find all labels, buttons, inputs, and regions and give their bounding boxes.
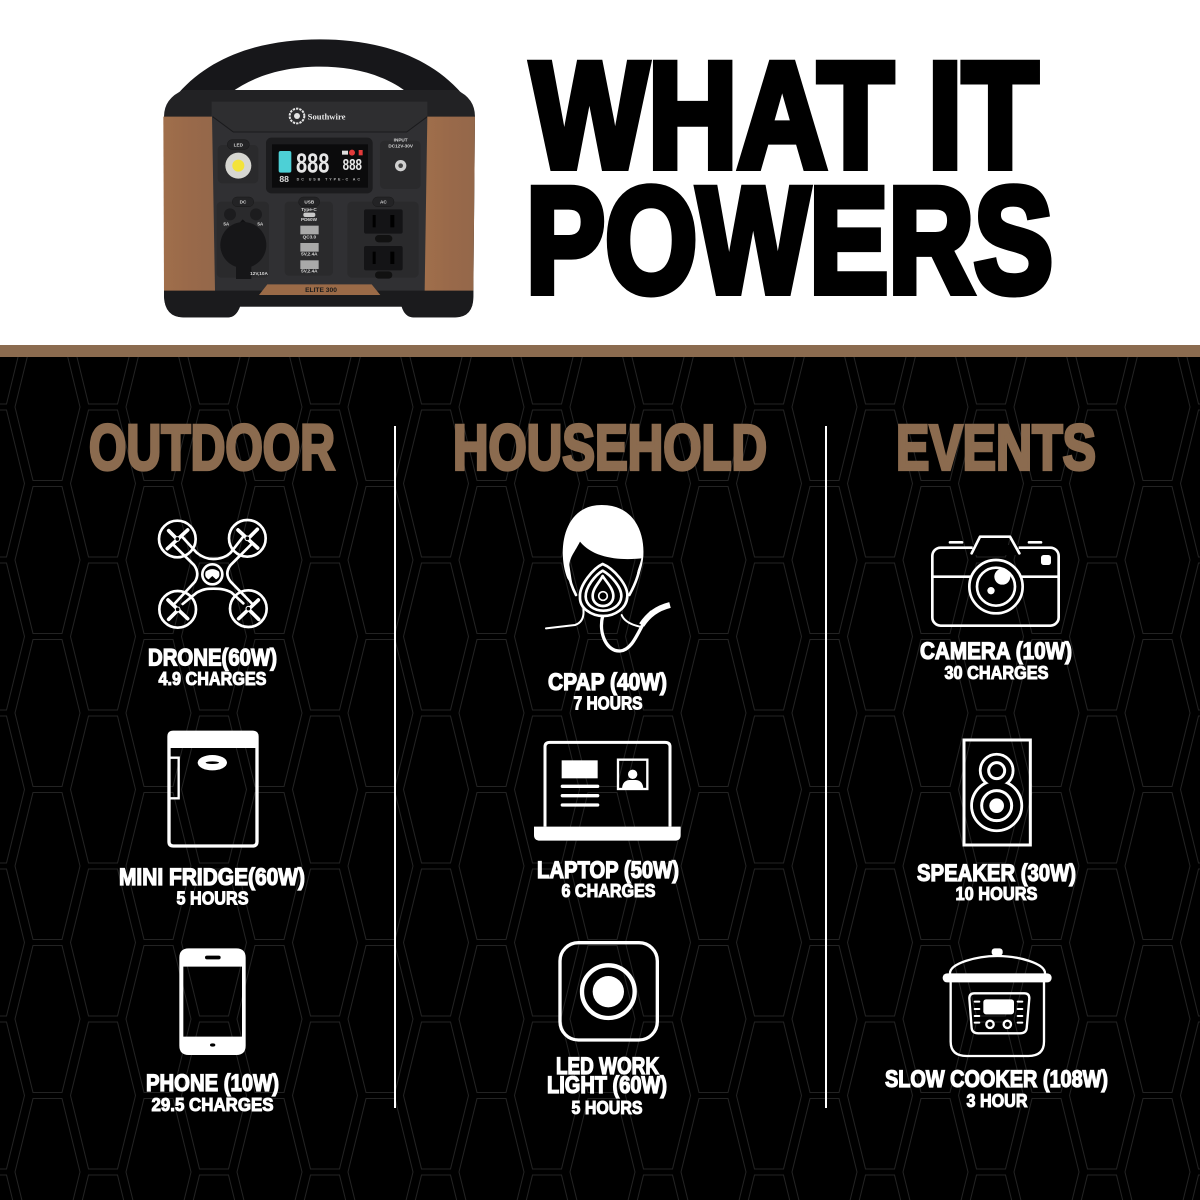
label: camera [920, 638, 1072, 683]
straps [546, 608, 640, 628]
label: speaker: SPEAKER (30W) [917, 860, 1076, 887]
title: WHAT IT [531, 31, 1038, 199]
label: speaker: 10 HOURS [956, 884, 1038, 904]
AC outlets: AC [380, 200, 387, 205]
label: mini fridge: MINI FRIDGE(60W) [119, 864, 305, 891]
label: slow cooker [885, 1066, 1108, 1111]
LCD display: 888 [343, 157, 362, 174]
label: drone [148, 644, 277, 689]
USB ports: Type-C [301, 207, 317, 212]
icon: drone [159, 520, 267, 628]
label: camera: 30 CHARGES [944, 663, 1048, 683]
DC input port: DC12V-30V [388, 144, 414, 149]
mask rings [580, 564, 627, 616]
label: camera: CAMERA (10W) [920, 638, 1072, 665]
label: phone: 29.5 CHARGES [152, 1095, 274, 1115]
icon: CPAP mask [546, 505, 670, 651]
label: slow cooker: SLOW COOKER (108W) [885, 1066, 1108, 1093]
label: laptop: 6 CHARGES [562, 881, 656, 901]
heading: Events: EVENTS [896, 412, 1096, 484]
label: laptop: LAPTOP (50W) [537, 857, 679, 884]
tan divider band [0, 345, 1200, 357]
ears [569, 570, 639, 595]
hose [602, 612, 652, 651]
icon: phone [179, 948, 246, 1055]
LCD display [266, 138, 373, 193]
title [526, 31, 1053, 324]
icon: mini fridge [167, 731, 259, 848]
label: CPAP: 7 HOURS [574, 694, 642, 714]
USB ports: QC3.0 [303, 235, 316, 240]
product: Southwire Elite 300 power station [163, 39, 475, 317]
DC input port: INPUT [394, 138, 408, 143]
Southwire logo: Southwire [308, 111, 346, 121]
divider right [825, 426, 827, 1108]
Elite 300 nameplate: ELITE 300 [305, 287, 337, 294]
heading: Household: HOUSEHOLD [453, 412, 767, 484]
LCD display: 888 [296, 148, 329, 179]
carry handle [178, 39, 462, 93]
AC outlets [347, 197, 419, 279]
icon: slow cooker [943, 948, 1052, 1056]
label: drone: 4.9 CHARGES [158, 669, 266, 689]
USB ports [285, 197, 333, 276]
DC input port [380, 138, 421, 189]
label: LED work light: 5 HOURS [572, 1098, 642, 1118]
label: LED work light [547, 1053, 667, 1118]
Elite 300 nameplate [259, 284, 380, 295]
icon: speaker [964, 740, 1030, 845]
icon: LED work light [560, 943, 657, 1040]
USB ports: 5V,2.4A [301, 251, 318, 256]
heading: Outdoor: OUTDOOR [89, 412, 335, 484]
LCD display: 88 [279, 174, 289, 184]
label: phone: PHONE (10W) [146, 1070, 279, 1097]
LED light [218, 140, 258, 183]
icon: laptop [534, 742, 681, 841]
label: mini fridge [119, 864, 305, 908]
label: CPAP: CPAP (40W) [548, 669, 667, 696]
DC socket: DC [240, 200, 247, 205]
label: phone [146, 1070, 279, 1115]
label: drone: DRONE(60W) [148, 644, 277, 672]
label: speaker [917, 860, 1076, 904]
label: laptop [537, 857, 679, 901]
DC socket [217, 197, 269, 279]
label: slow cooker: 3 HOUR [966, 1091, 1028, 1111]
copper side panels [163, 117, 215, 291]
divider left [394, 426, 396, 1108]
hair [563, 505, 643, 587]
body shell [164, 90, 475, 317]
label: mini fridge: 5 HOURS [176, 888, 248, 908]
USB ports: USB [304, 200, 315, 205]
LED light: LED [234, 142, 244, 147]
LCD display: DC USB TYPE-C AC [297, 178, 360, 182]
DC socket: 5A [223, 222, 230, 227]
label: CPAP [548, 669, 667, 714]
USB ports: 5V,2.4A [301, 269, 318, 274]
icon: camera [932, 537, 1059, 626]
USB ports: PD60W [301, 217, 318, 222]
DC socket: 12V,10A [250, 271, 268, 276]
label: LED work light: LIGHT (60W) [547, 1072, 667, 1099]
label: LED work light: LED WORK [556, 1053, 660, 1080]
Southwire logo [290, 109, 346, 123]
title: POWERS [526, 156, 1053, 324]
DC socket: 5A [257, 222, 264, 227]
